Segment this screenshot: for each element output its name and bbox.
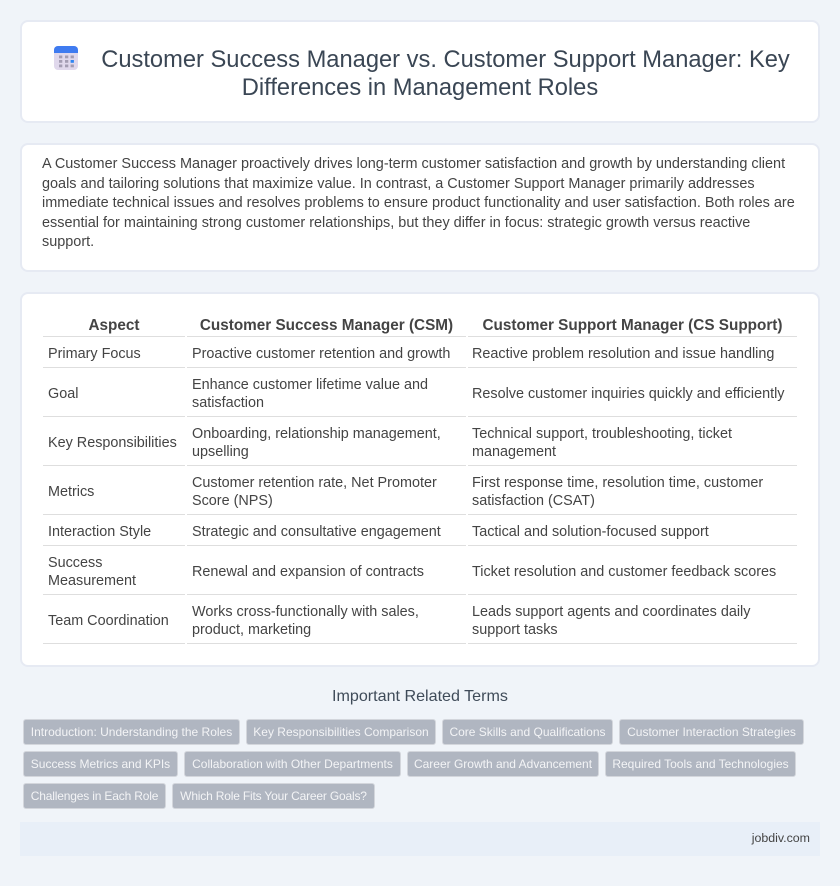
footer bar	[20, 822, 820, 856]
intro text: essential for maintaining strong customer relationships, but they differ in focus: strategic growth versus reactive	[42, 215, 750, 231]
comparison table: Success	[48, 555, 102, 571]
icon: calendar	[54, 46, 78, 70]
comparison table: Works cross-functionally with sales,	[192, 604, 419, 620]
comparison table: Key Responsibilities	[48, 435, 177, 451]
comparison table: upselling	[192, 444, 249, 460]
comparison table: satisfaction (CSAT)	[472, 493, 595, 509]
title: Differences in Management Roles	[242, 75, 598, 101]
related term tags: Career Growth and Advancement	[414, 757, 592, 771]
comparison table: Customer Success Manager (CSM)	[200, 317, 453, 334]
heading: related terms: Important Related Terms	[332, 687, 508, 705]
comparison table: Primary Focus	[48, 346, 141, 362]
comparison table: Resolve customer inquiries quickly and efficiently	[472, 386, 784, 402]
title: Customer Success Manager vs. Customer Support Manager: Key	[101, 47, 790, 73]
comparison table: Team Coordination	[48, 613, 169, 629]
panel: introduction	[20, 143, 820, 272]
comparison table: Measurement	[48, 573, 136, 589]
comparison table	[43, 317, 797, 644]
comparison table: Renewal and expansion of contracts	[192, 564, 424, 580]
header panel	[20, 20, 820, 123]
comparison table: Onboarding, relationship management,	[192, 426, 441, 442]
comparison table: Customer Support Manager (CS Support)	[482, 317, 782, 334]
comparison table: support tasks	[472, 622, 558, 638]
related term tags: Collaboration with Other Departments	[192, 757, 393, 771]
related term tags: Introduction: Understanding the Roles	[31, 725, 232, 739]
comparison table: Aspect	[88, 317, 140, 334]
panel: comparison table	[20, 292, 820, 667]
intro text	[42, 156, 795, 250]
comparison table: product, marketing	[192, 622, 311, 638]
comparison table: Enhance customer lifetime value and	[192, 377, 428, 393]
title	[101, 47, 790, 101]
comparison table: Reactive problem resolution and issue handling	[472, 346, 774, 362]
comparison table: First response time, resolution time, customer	[472, 475, 763, 491]
comparison table: Leads support agents and coordinates daily	[472, 604, 750, 620]
footer source: jobdiv.com	[752, 831, 810, 845]
intro text: support.	[42, 234, 94, 250]
related term tags: Required Tools and Technologies	[612, 757, 789, 771]
comparison table: management	[472, 444, 556, 460]
related term tags: Key Responsibilities Comparison	[253, 725, 429, 739]
comparison table: Ticket resolution and customer feedback scores	[472, 564, 776, 580]
comparison table: satisfaction	[192, 395, 264, 411]
comparison table: Score (NPS)	[192, 493, 273, 509]
related term tags: Core Skills and Qualifications	[449, 725, 606, 739]
intro text: immediate technical issues and resolves problems to ensure product functionality and user satisfaction. Both roles are	[42, 195, 795, 211]
comparison table: Strategic and consultative engagement	[192, 524, 441, 540]
comparison table: Proactive customer retention and growth	[192, 346, 450, 362]
intro text: goals and tailoring solutions that maximize value. In contrast, a Customer Support Manager primarily addresses	[42, 176, 755, 192]
comparison table: Tactical and solution-focused support	[472, 524, 709, 540]
comparison table: Customer retention rate, Net Promoter	[192, 475, 437, 491]
comparison table: Technical support, troubleshooting, ticket	[472, 426, 732, 442]
comparison table: Interaction Style	[48, 524, 151, 540]
related term tags: Challenges in Each Role	[31, 789, 158, 803]
related term tags: Customer Interaction Strategies	[627, 725, 796, 739]
comparison table: Goal	[48, 386, 78, 402]
intro text: A Customer Success Manager proactively drives long-term customer satisfaction and growth by understanding client	[42, 156, 785, 172]
related term tags: Which Role Fits Your Career Goals?	[180, 789, 367, 803]
related term tags	[23, 719, 804, 809]
related term tags: Success Metrics and KPIs	[31, 757, 170, 771]
comparison table: Metrics	[48, 484, 94, 500]
